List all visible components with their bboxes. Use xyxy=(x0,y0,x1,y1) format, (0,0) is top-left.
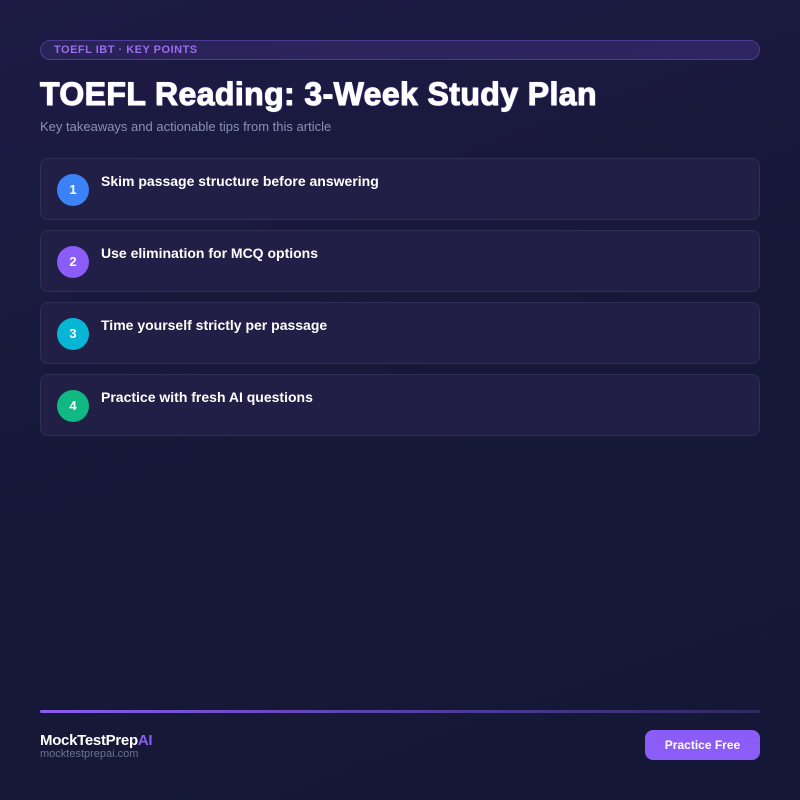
badge: TOEFL IBT · KEY POINTS xyxy=(54,44,198,56)
title: TOEFL Reading: 3-Week Study Plan xyxy=(40,76,597,112)
subtitle: Key takeaways and actionable tips from this article xyxy=(40,119,331,134)
number 3: 3 xyxy=(69,326,77,341)
number 2 xyxy=(57,246,89,278)
number 1: 1 xyxy=(69,182,77,197)
card 4 xyxy=(40,374,760,436)
number 4: 4 xyxy=(69,398,77,413)
tip 4: Practice with fresh AI questions xyxy=(101,389,313,405)
card 2 xyxy=(40,230,760,292)
button xyxy=(645,730,760,760)
url: mocktestprepai.com xyxy=(40,748,138,760)
card 3 xyxy=(40,302,760,364)
number 1 xyxy=(57,174,89,206)
tip 2: Use elimination for MCQ options xyxy=(101,245,318,261)
number 3 xyxy=(57,318,89,350)
tip 1: Skim passage structure before answering xyxy=(101,173,379,189)
number 4 xyxy=(57,390,89,422)
brand: MockTestPrepAI xyxy=(40,732,152,749)
number 2: 2 xyxy=(69,254,77,269)
button: Practice Free xyxy=(665,738,740,752)
badge xyxy=(40,40,760,60)
card 1 xyxy=(40,158,760,220)
tip 3: Time yourself strictly per passage xyxy=(101,317,327,333)
